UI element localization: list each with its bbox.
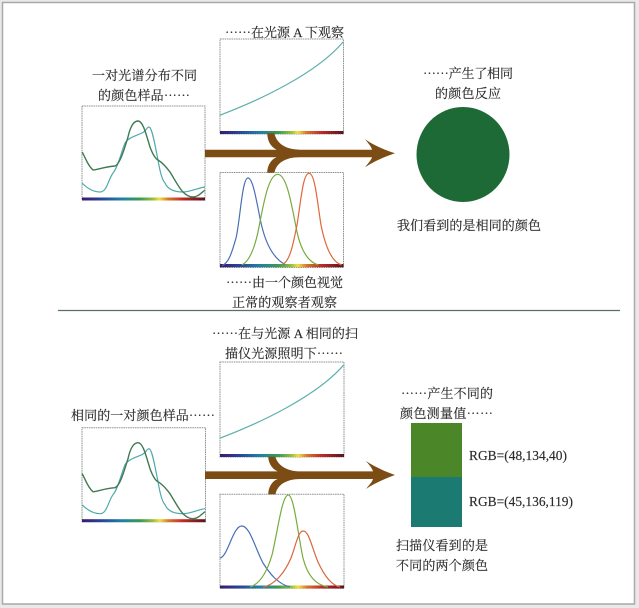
heading: scanner illuminant: ……在与光源 A 相同的扫 (212, 323, 358, 342)
heading: scanner illuminant (212, 323, 358, 362)
curve: green channel (250, 495, 328, 587)
curve: illuminant power (220, 42, 343, 115)
heading: same response: 的颜色反应 (435, 86, 501, 101)
label: green RGB value: RGB=(48,134,40) (469, 448, 567, 463)
color swatch: teal RGB(45,136,119) (411, 477, 462, 527)
caption: scanner sees two colors: 扫描仪看到的是 (396, 538, 488, 553)
heading: same response: ……产生了相同 (423, 63, 513, 82)
curve: dark green sample (82, 121, 205, 197)
curve: cyan sample (82, 449, 205, 514)
caption: scanner sees two colors: 不同的两个颜色 (396, 558, 488, 573)
heading: same sample pair: 相同的一对颜色样品…… (71, 405, 215, 424)
label: illuminant A: ……在光源 A 下观察 (225, 22, 344, 41)
chart: sample spectra (82, 106, 205, 200)
label: teal RGB value: RGB=(45,136,119) (469, 494, 573, 509)
label: observer: ……由一个颜色视觉 (226, 272, 343, 291)
chart: scanner sensitivities (220, 494, 344, 588)
caption: scanner sees two colors (396, 538, 488, 573)
heading: different measurements (400, 383, 493, 422)
curve: blue channel (220, 526, 290, 587)
panel: scanner (bottom) (71, 323, 573, 588)
color swatch: matching circle (416, 107, 510, 202)
heading: sample pair: 的颜色样品…… (98, 85, 190, 104)
chart: sample spectra (82, 428, 206, 522)
heading: same response (423, 63, 513, 101)
heading: sample pair: 一对光谱分布不同 (92, 68, 197, 83)
chart: normal observer sensitivities (220, 172, 344, 310)
label: observer (226, 272, 343, 310)
arrow: merging flow (205, 133, 395, 173)
heading: different measurements: 颜色测量值…… (400, 403, 493, 422)
chart: illuminant A (220, 22, 344, 134)
curve: cyan sample (82, 127, 205, 192)
heading: different measurements: ……产生不同的 (401, 383, 493, 402)
arrow: merging flow (205, 457, 395, 494)
curve: green cone (242, 174, 318, 265)
label: observer: 正常的观察者观察 (232, 295, 337, 310)
caption: same color seen: 我们看到的是相同的颜色 (397, 218, 541, 233)
curve: dark green sample (82, 443, 205, 519)
color swatch: green RGB(48,134,40) (411, 423, 462, 477)
heading: scanner illuminant: 描仪光源照明下…… (225, 343, 343, 362)
curve: red channel (263, 531, 340, 587)
heading: sample pair (92, 68, 197, 104)
curve: red cone (283, 173, 342, 265)
curve: illuminant power (220, 365, 344, 438)
curve: blue cone (222, 178, 285, 266)
chart: scanner illuminant (220, 362, 344, 457)
panel: human observer (top) (82, 22, 541, 310)
